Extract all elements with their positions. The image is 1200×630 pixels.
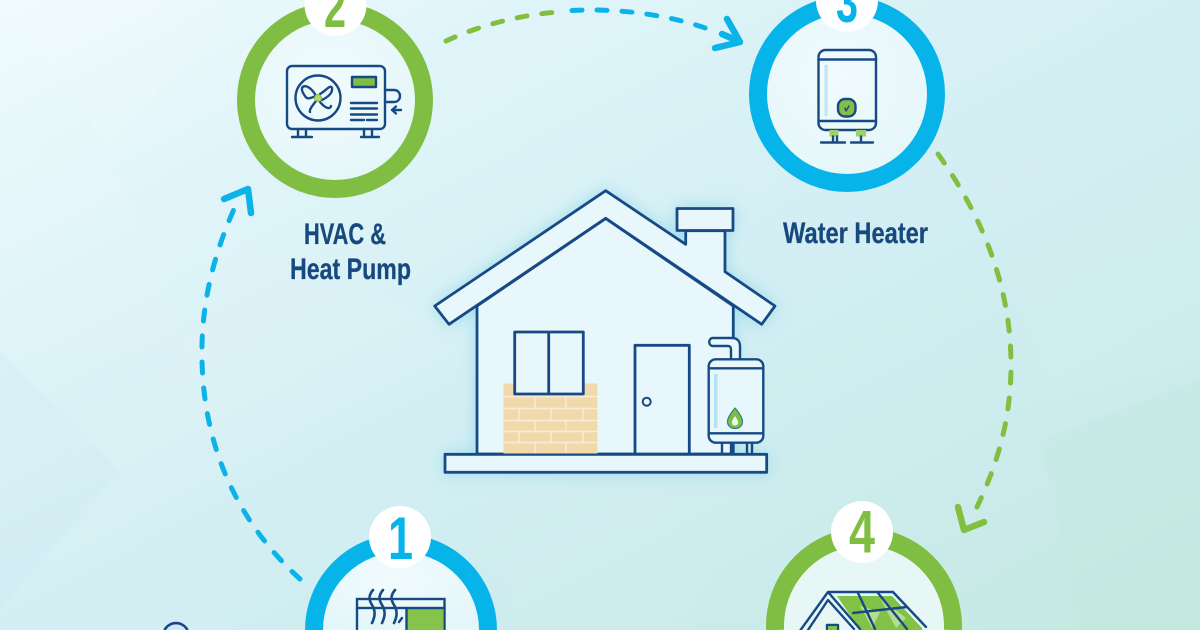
icon: water heater bbox=[818, 50, 876, 142]
number badge bbox=[369, 506, 431, 568]
door bbox=[635, 345, 689, 454]
ring bbox=[246, 11, 424, 189]
label bbox=[290, 218, 411, 286]
number badge bbox=[304, 0, 366, 36]
step 4: solar bbox=[775, 498, 953, 630]
number badge bbox=[816, 0, 878, 32]
brick wall patch bbox=[504, 384, 598, 454]
step 2: HVAC and heat pump bbox=[246, 0, 424, 286]
arrow: HVAC to water heater bbox=[446, 10, 740, 48]
water heater on house bbox=[709, 338, 763, 454]
window bbox=[515, 332, 583, 394]
ring bbox=[775, 537, 953, 630]
step 1: insulation bbox=[314, 505, 488, 630]
label: Water Heater bbox=[783, 217, 928, 250]
icon: heat pump bbox=[287, 66, 401, 137]
ring bbox=[314, 543, 488, 630]
number badge bbox=[831, 501, 893, 563]
house body and roof bbox=[435, 191, 775, 472]
ring bbox=[758, 5, 936, 183]
number 4: 4 bbox=[849, 498, 875, 566]
arrow: insulation to HVAC bbox=[202, 189, 300, 579]
icon: partial badge at bottom left bbox=[164, 623, 188, 630]
arrow: water heater to solar bbox=[938, 154, 1011, 530]
icon: solar roof bbox=[801, 592, 926, 630]
step 3: water heater bbox=[758, 0, 936, 250]
number 1: 1 bbox=[388, 505, 413, 572]
label: Heat Pump bbox=[290, 253, 411, 286]
icon: insulated wall bbox=[357, 590, 444, 630]
label: HVAC & bbox=[304, 218, 386, 251]
flame bbox=[728, 408, 742, 428]
house illustration bbox=[435, 191, 775, 472]
